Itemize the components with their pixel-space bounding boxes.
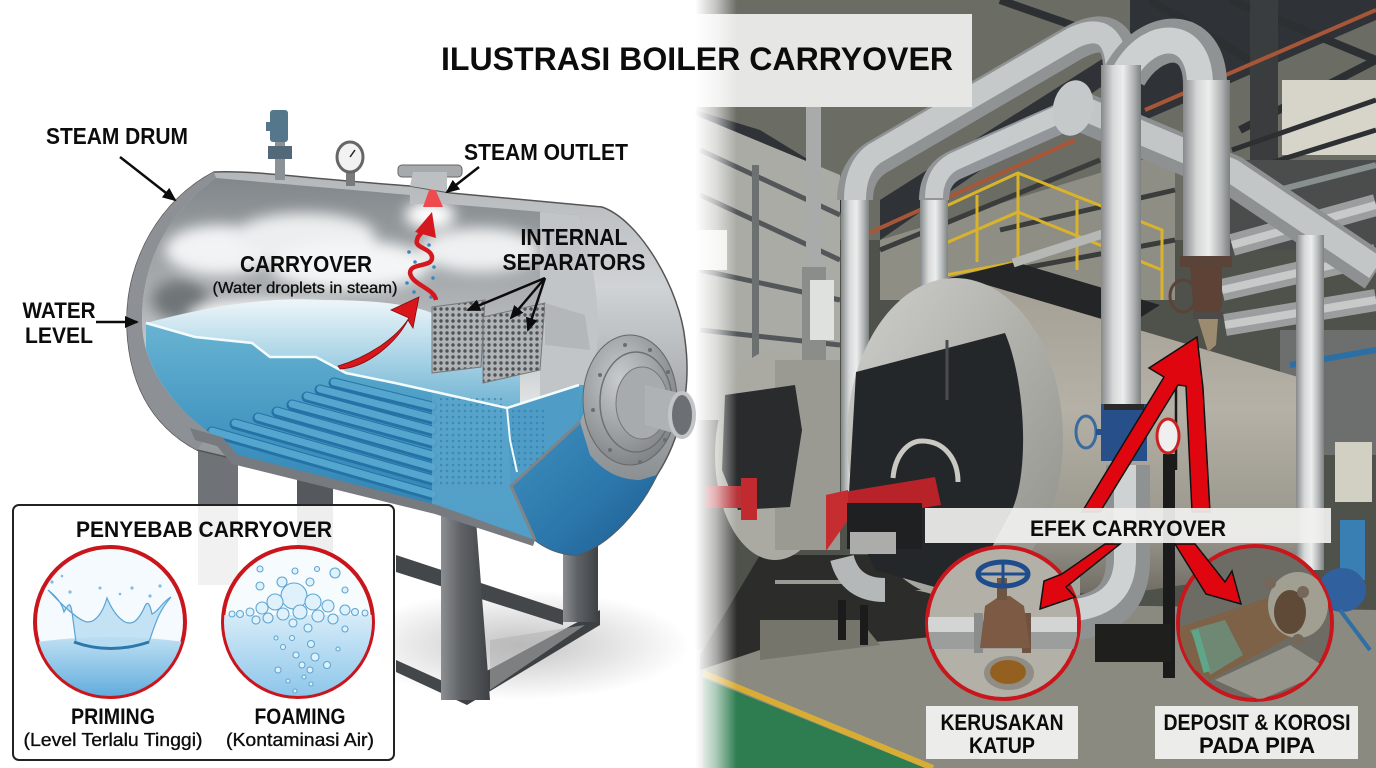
yellow platform — [944, 173, 1162, 300]
label: foaming: (Kontaminasi Air) — [226, 730, 374, 750]
silver pipes — [855, 32, 1376, 272]
heading: PENYEBAB CARRYOVER — [76, 517, 332, 542]
red curved arrow — [338, 297, 419, 369]
tank interior — [142, 178, 597, 540]
steam outlet nozzle — [398, 165, 462, 192]
label: steam drum: STEAM DRUM — [46, 123, 188, 149]
label: priming: (Level Terlalu Tinggi) — [24, 730, 202, 750]
label: carryover: CARRYOVER — [240, 251, 372, 277]
ladder and pole — [1163, 384, 1200, 678]
labels: boiler parts — [22, 123, 646, 348]
panel: factory photo — [695, 0, 1376, 768]
front boiler — [847, 278, 1307, 600]
support frame — [198, 440, 600, 705]
pressure gauge — [337, 142, 363, 186]
label: internal separators — [468, 224, 646, 330]
heading band — [925, 508, 1331, 543]
right side equipment — [1095, 442, 1372, 662]
burner — [826, 477, 941, 645]
safety valve — [266, 110, 292, 180]
outlet glow arrow — [423, 182, 443, 207]
label: deposit dan korosi: PADA PIPA — [1199, 733, 1315, 758]
green floor — [703, 678, 925, 768]
factory roof — [695, 0, 1376, 250]
carryover squiggle arrow — [410, 212, 436, 300]
label: priming — [24, 704, 202, 750]
panel: efek carryover: EFEK CARRYOVER — [1030, 516, 1226, 541]
arrows to circles — [1040, 544, 1241, 609]
label: steam outlet: STEAM OUTLET — [464, 139, 628, 165]
factory wall and window — [695, 107, 840, 420]
back boiler — [705, 350, 840, 560]
label: deposit dan korosi — [1155, 706, 1358, 759]
panel: penyebab carryover — [13, 505, 394, 760]
label: foaming — [226, 704, 374, 750]
heating tubes — [212, 382, 432, 495]
label: steam drum — [46, 123, 188, 200]
left vertical pipe — [841, 190, 869, 520]
rim — [127, 172, 216, 450]
second vertical pipe — [920, 190, 948, 290]
illustration: boiler cutaway — [127, 110, 694, 705]
label: kerusakan katup: KATUP — [969, 733, 1035, 758]
white fade over photo — [695, 0, 737, 768]
platform base — [920, 262, 1160, 340]
panel: efek carryover — [925, 337, 1358, 759]
label: carryover — [212, 251, 398, 297]
label: deposit dan korosi: DEPOSIT & KOROSI — [1164, 710, 1350, 735]
label: kerusakan katup: KERUSAKAN — [940, 710, 1064, 735]
title band — [695, 14, 972, 107]
label: water level: LEVEL — [25, 323, 93, 348]
title: ILUSTRASI BOILER CARRYOVER — [441, 41, 953, 77]
dark base under boilers — [700, 555, 1110, 670]
label: steam outlet — [447, 139, 628, 192]
icon: corroded pipe — [1178, 546, 1332, 700]
icon: damaged valve — [927, 547, 1079, 699]
steam clouds — [152, 201, 540, 329]
label: carryover: (Water droplets in steam) — [212, 280, 398, 297]
front flange — [583, 335, 694, 465]
wall behind platform — [880, 150, 1175, 300]
label: internal separators: SEPARATORS — [502, 249, 646, 275]
floor — [695, 605, 1376, 768]
label: water level — [22, 298, 137, 348]
arrow shafts into banner — [1082, 337, 1210, 512]
blue valve — [1076, 404, 1147, 461]
rusty valve — [1170, 256, 1232, 352]
internal separators — [432, 300, 590, 383]
tank shell — [127, 172, 687, 555]
warning sign — [1157, 419, 1179, 453]
right background pipes — [1222, 205, 1376, 325]
label: foaming: FOAMING — [254, 704, 346, 729]
label: priming: PRIMING — [71, 704, 155, 729]
label: kerusakan katup — [926, 706, 1078, 759]
label: water level: WATER — [22, 298, 96, 323]
ground shadow — [350, 590, 690, 700]
icon: priming splash — [35, 547, 185, 700]
saddle left — [190, 428, 535, 546]
icon: foaming bubbles — [223, 547, 373, 700]
label: internal separators: INTERNAL — [520, 224, 628, 250]
outer blue bottom — [511, 422, 657, 555]
water droplets — [405, 243, 436, 299]
